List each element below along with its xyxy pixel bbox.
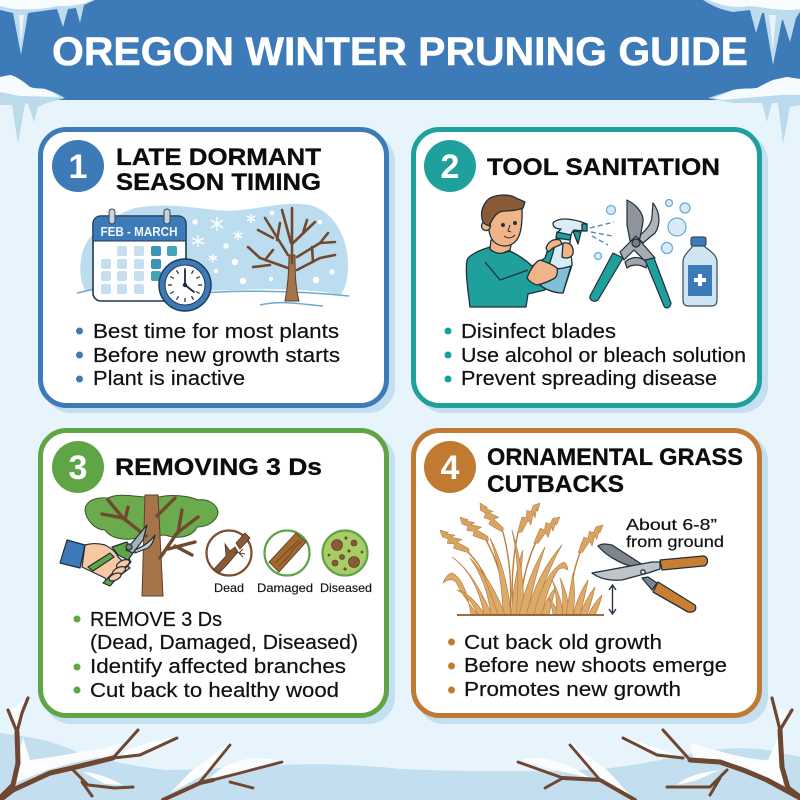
height callout: About 6-8” — [626, 517, 717, 534]
panel 4: ornamental grass cutbacks — [414, 430, 768, 724]
bullet list 1: Plant is inactive — [93, 368, 245, 390]
height callout: from ground — [626, 534, 724, 551]
snowy ground — [0, 733, 800, 800]
badge 2 — [424, 140, 476, 192]
badge 2: 2 — [441, 148, 459, 186]
bullet list 2: Prevent spreading disease — [461, 368, 717, 390]
heading 1 — [116, 144, 321, 196]
icicles top right — [703, 0, 800, 65]
bullet list 3: (Dead, Damaged, Diseased) — [90, 632, 358, 654]
badge 1 — [52, 140, 104, 192]
calendar cells — [101, 246, 177, 294]
icicles mid left — [0, 75, 65, 144]
bullet list 3 — [74, 609, 358, 702]
tree being pruned — [85, 495, 218, 596]
person spraying bottle — [466, 195, 587, 307]
badge 1: 1 — [69, 148, 87, 186]
heading 4: CUTBACKS — [487, 471, 624, 498]
bypass pruners — [590, 200, 671, 308]
title: OREGON WINTER PRUNING GUIDE — [52, 30, 748, 74]
badge 4: 4 — [441, 449, 460, 487]
bullet list 4: Cut back old growth — [464, 632, 662, 654]
winter scene illustration — [77, 204, 349, 311]
heading 1: SEASON TIMING — [116, 169, 321, 196]
bullet list 1: Before new growth starts — [93, 345, 340, 367]
heading 4: ORNAMENTAL GRASS — [487, 444, 743, 471]
badge 3 — [52, 441, 104, 493]
spray bottle — [540, 219, 587, 293]
hedge shears — [592, 544, 708, 612]
badge 4 — [424, 441, 476, 493]
snowflakes — [192, 212, 334, 284]
calendar month label: FEB - MARCH — [100, 225, 178, 239]
bare tree — [248, 208, 335, 301]
ground line — [457, 614, 604, 616]
heading 4 — [487, 444, 743, 498]
heading 2: TOOL SANITATION — [487, 154, 720, 181]
icon: diseased leaf — [322, 530, 368, 576]
bullet list 4: Before new shoots emerge — [464, 655, 727, 677]
header banner — [0, 0, 800, 100]
snowy branches left — [0, 698, 282, 800]
grass blades — [443, 530, 602, 615]
icon captions: Dead — [214, 581, 244, 595]
icon: dead branch — [206, 530, 252, 576]
icon captions: Diseased — [320, 581, 372, 595]
disinfectant bottle — [683, 237, 717, 306]
icon: damaged branch — [264, 530, 310, 576]
snowy background blob — [80, 204, 348, 295]
ornamental grass — [436, 499, 607, 615]
bullet list 1 — [76, 321, 340, 390]
height arrow — [609, 585, 616, 614]
bullet list 1: Best time for most plants — [93, 321, 339, 343]
spray mist — [590, 222, 614, 245]
height callout — [626, 517, 724, 551]
hand holding pruners — [60, 525, 155, 586]
bullet list 2: Disinfect blades — [461, 321, 616, 343]
heading 3: REMOVING 3 Ds — [115, 454, 322, 481]
grass plumes — [436, 499, 607, 558]
panel 3: removing 3 Ds — [40, 430, 395, 724]
badge 3: 3 — [69, 449, 87, 487]
icon captions: Damaged — [257, 581, 313, 595]
snow on right branches — [522, 708, 790, 795]
icicles top left — [0, 0, 95, 55]
snowy branches right — [518, 698, 800, 800]
calendar — [93, 209, 186, 301]
bubbles — [594, 200, 690, 260]
bullet list 3: Cut back to healthy wood — [90, 680, 339, 702]
heading 1: LATE DORMANT — [116, 144, 321, 171]
panel 2: tool sanitation — [414, 130, 768, 413]
icicles mid right — [708, 77, 800, 144]
bullet list 2: Use alcohol or bleach solution — [461, 345, 746, 367]
bullet list 3: REMOVE 3 Ds — [90, 609, 222, 631]
bullet list 4: Promotes new growth — [464, 679, 681, 701]
panel 1: late dormant season timing — [40, 130, 395, 413]
icon captions — [214, 581, 372, 595]
bullet list 4 — [448, 632, 727, 701]
clock — [159, 259, 211, 311]
bullet list 2 — [444, 321, 746, 390]
snow on left branches — [9, 700, 277, 793]
grass stems — [468, 532, 582, 612]
bullet list 3: Identify affected branches — [90, 656, 346, 678]
